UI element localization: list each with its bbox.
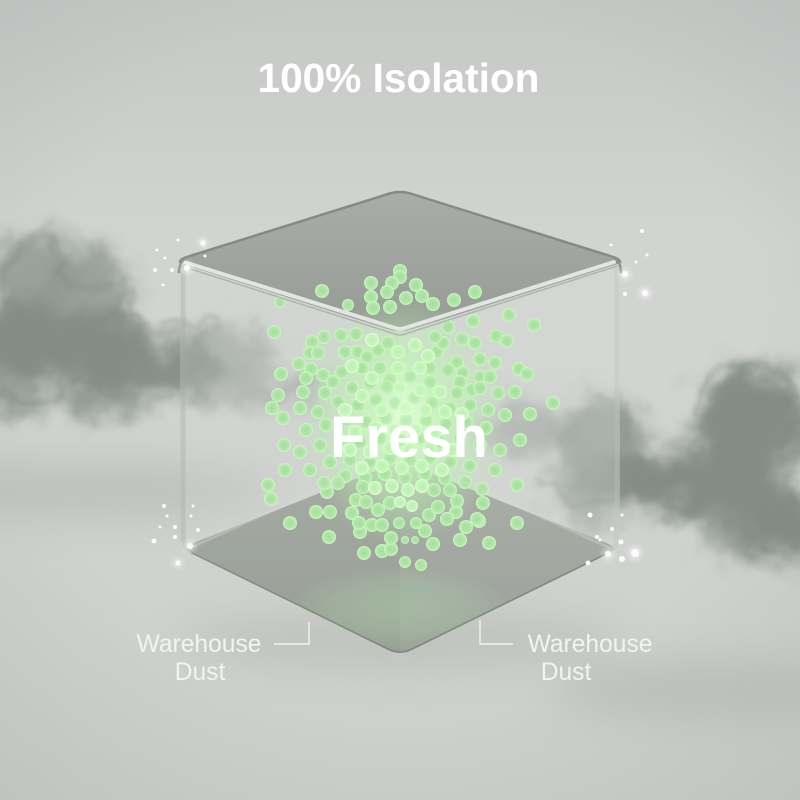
sparkles: bottom right (586, 512, 642, 566)
smoke: left plume (0, 235, 326, 420)
cube back: floor and top face (180, 192, 620, 653)
right label: Warehouse Dust (528, 631, 652, 686)
right label: Warehouse Dust: Dust (541, 659, 591, 686)
smoke: right plume (480, 363, 800, 564)
sparkles: bottom left (152, 504, 200, 568)
sparkles: top right (610, 229, 651, 299)
left label: Warehouse Dust: Warehouse (137, 631, 261, 658)
title: 100% Isolation (258, 55, 539, 101)
left label: Warehouse Dust (137, 631, 261, 686)
glass cube side panes (180, 262, 620, 655)
floor glow reflection (317, 576, 483, 640)
left leader line (274, 622, 309, 644)
glass cube edges (179, 256, 621, 652)
green glow core (302, 295, 502, 545)
right leader line (480, 620, 513, 644)
green particle cluster (261, 264, 560, 571)
center label: Fresh: Fresh (330, 405, 488, 470)
bright central particles (338, 333, 469, 512)
left label: Warehouse Dust: Dust (175, 659, 225, 686)
right label: Warehouse Dust: Warehouse (528, 631, 652, 658)
sparkles: top left (153, 238, 208, 286)
glow overlay on particles (353, 330, 457, 490)
